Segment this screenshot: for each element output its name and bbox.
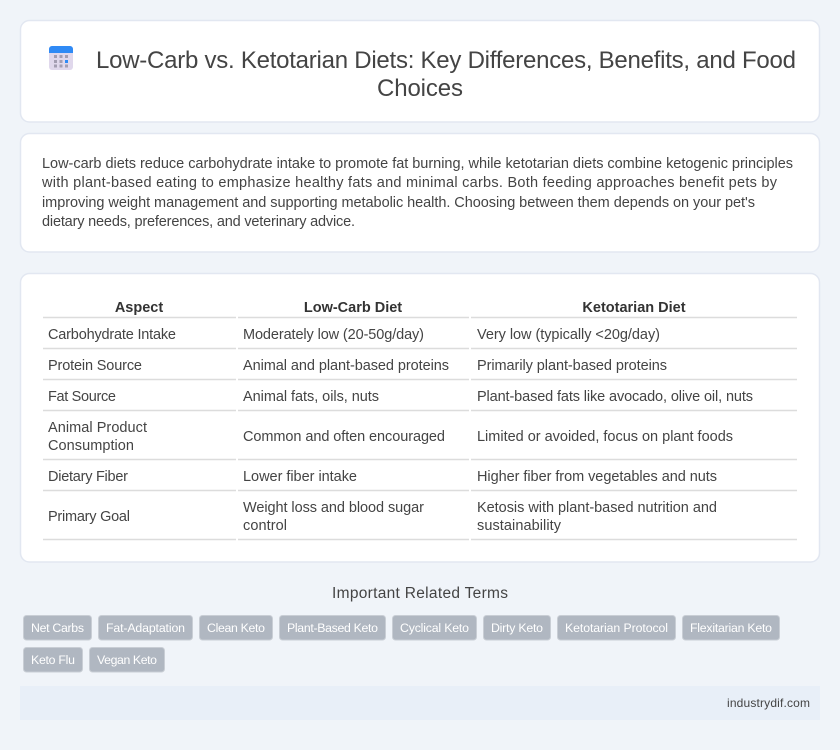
table header: Aspect bbox=[115, 300, 163, 316]
tag: Ketotarian Protocol bbox=[558, 616, 676, 640]
tag: Keto Flu: Keto Flu bbox=[31, 653, 75, 667]
panel: comparison table bbox=[20, 274, 820, 562]
row: primary goal: sustainability bbox=[477, 518, 562, 534]
table header: Ketotarian Diet bbox=[582, 300, 686, 316]
row: carbohydrate intake: Moderately low (20-50g/day) bbox=[243, 327, 424, 343]
row: fat source: Fat Source bbox=[48, 389, 116, 405]
text block: summary: Low-carb diets reduce carbohydrate intake to promote fat burning, while ketotarian diets combine ketogenic principles bbox=[42, 156, 793, 172]
footer bar bbox=[20, 686, 820, 720]
row: dietary fiber: Dietary Fiber bbox=[48, 469, 128, 485]
text block: summary bbox=[41, 156, 793, 230]
heading: related terms: Important Related Terms bbox=[332, 585, 508, 602]
row: primary goal bbox=[48, 500, 717, 534]
tag: Fat-Adaptation bbox=[98, 616, 192, 640]
row: dietary fiber bbox=[48, 469, 717, 485]
row: dietary fiber: Higher fiber from vegetables and nuts bbox=[477, 469, 717, 485]
panel: introduction bbox=[20, 134, 820, 252]
related term tags bbox=[24, 616, 780, 672]
row: primary goal: Weight loss and blood sugar bbox=[243, 500, 424, 516]
tag: Clean Keto bbox=[200, 616, 272, 640]
tag: Cyclical Keto: Cyclical Keto bbox=[400, 621, 469, 635]
tag: Plant-Based Keto: Plant-Based Keto bbox=[287, 621, 378, 635]
row: protein source: Animal and plant-based proteins bbox=[243, 358, 449, 374]
row: animal product consumption: Limited or avoided, focus on plant foods bbox=[477, 429, 733, 445]
row: primary goal: control bbox=[243, 518, 287, 534]
tag: Vegan Keto: Vegan Keto bbox=[97, 653, 157, 667]
tag: Vegan Keto bbox=[90, 648, 164, 672]
tag: Ketotarian Protocol: Ketotarian Protocol bbox=[565, 621, 668, 635]
row: fat source: Animal fats, oils, nuts bbox=[243, 389, 379, 405]
row: animal product consumption: Consumption bbox=[48, 438, 134, 454]
tag: Flexitarian Keto bbox=[682, 616, 780, 640]
heading: Choices bbox=[377, 75, 463, 102]
row: fat source: Plant-based fats like avocado, olive oil, nuts bbox=[477, 389, 753, 405]
row: protein source bbox=[48, 358, 667, 374]
tag: Cyclical Keto bbox=[392, 616, 476, 640]
row: animal product consumption: Animal Product bbox=[48, 420, 147, 436]
tag: Dirty Keto bbox=[484, 616, 550, 640]
footer bar: industrydif.com bbox=[727, 696, 810, 710]
table header: Low-Carb Diet bbox=[304, 300, 402, 316]
tag: Net Carbs bbox=[24, 616, 92, 640]
tag: Dirty Keto: Dirty Keto bbox=[491, 621, 543, 635]
row: dietary fiber: Lower fiber intake bbox=[243, 469, 357, 485]
panel: title bbox=[20, 20, 820, 122]
tag: Keto Flu bbox=[24, 648, 82, 672]
heading: Low-Carb vs. Ketotarian Diets: Key Differences, Benefits, and Food bbox=[96, 47, 796, 74]
text block: summary: with plant-based eating to emphasize healthy fats and minimal carbs. Both feeding approaches benefit pets by bbox=[41, 175, 778, 191]
text block: summary: improving weight management and supporting metabolic health. Choosing between them depends on your pet's bbox=[42, 195, 755, 211]
row: carbohydrate intake: Very low (typically <20g/day) bbox=[477, 327, 660, 343]
row: animal product consumption bbox=[48, 420, 733, 454]
heading bbox=[96, 47, 796, 102]
row: protein source: Primarily plant-based proteins bbox=[477, 358, 667, 374]
icon: calendar bbox=[49, 46, 73, 70]
text block: summary: dietary needs, preferences, and veterinary advice. bbox=[42, 214, 355, 230]
tag: Plant-Based Keto bbox=[280, 616, 386, 640]
tag: Clean Keto: Clean Keto bbox=[207, 621, 265, 635]
row: carbohydrate intake: Carbohydrate Intake bbox=[48, 327, 176, 343]
row: animal product consumption: Common and often encouraged bbox=[243, 429, 445, 445]
row: primary goal: Ketosis with plant-based nutrition and bbox=[477, 500, 717, 516]
tag: Fat-Adaptation: Fat-Adaptation bbox=[106, 621, 185, 635]
table header bbox=[115, 300, 686, 316]
row: primary goal: Primary Goal bbox=[48, 509, 130, 525]
row: carbohydrate intake bbox=[48, 327, 660, 343]
tag: Net Carbs: Net Carbs bbox=[31, 621, 84, 635]
row: protein source: Protein Source bbox=[48, 358, 142, 374]
row: fat source bbox=[48, 389, 753, 405]
tag: Flexitarian Keto: Flexitarian Keto bbox=[690, 621, 772, 635]
